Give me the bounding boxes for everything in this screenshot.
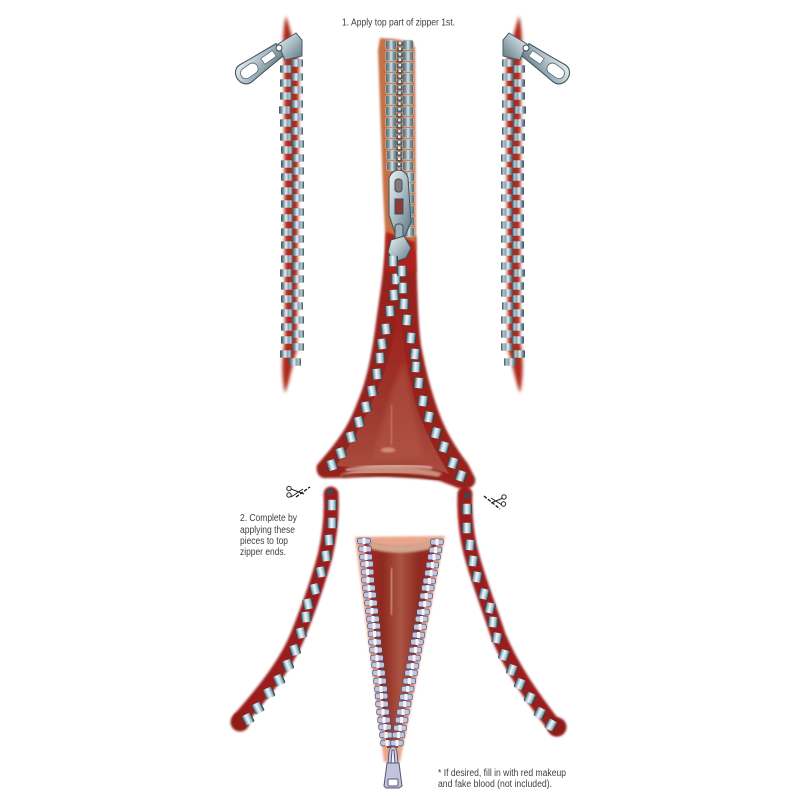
icon: left scissors and cut line	[287, 486, 310, 497]
text: step 2 instruction: pieces to top	[240, 536, 288, 547]
wound bulb end	[230, 712, 250, 732]
metal teeth	[462, 493, 558, 732]
metal teeth	[279, 59, 304, 366]
closed zipper slider	[388, 170, 411, 262]
open wound teeth, right side	[397, 266, 467, 482]
open wound teeth, left side	[326, 256, 401, 471]
footnote text	[438, 768, 566, 790]
icon: right scissors and cut line	[484, 495, 506, 509]
inner red wound	[364, 540, 437, 748]
heading: step 1 instruction: 1. Apply top part of zipper 1st.	[342, 18, 455, 28]
wound bulb end	[548, 718, 566, 736]
flesh highlight	[391, 568, 392, 615]
red wound line	[282, 16, 299, 393]
footnote text: and fake blood (not included).	[438, 779, 552, 790]
red wound line	[241, 494, 331, 718]
red open wound shape	[317, 236, 475, 489]
center closed zipper and open wound	[317, 38, 475, 489]
text: step 2 instruction: 2. Complete by	[240, 513, 297, 524]
metal teeth	[241, 489, 337, 726]
text: step 2 instruction: applying these	[240, 525, 295, 536]
inner flesh area	[336, 310, 449, 474]
red wound line	[465, 494, 556, 728]
flesh highlights	[340, 362, 442, 479]
left open zipper strip	[232, 16, 304, 393]
red seam below slider	[385, 232, 416, 272]
top tan band	[366, 538, 434, 553]
left teeth	[358, 538, 393, 746]
lower left zipper end piece	[230, 489, 337, 732]
closed zipper teeth	[386, 40, 414, 237]
footnote text: * If desired, fill in with red makeup	[438, 768, 566, 779]
right open zipper strip	[501, 16, 573, 393]
zipper slider and pull tab	[232, 33, 302, 88]
text: step 2 instruction	[240, 513, 297, 558]
zipper slider and pull	[384, 747, 402, 788]
pink outline of zipper tape	[355, 536, 445, 762]
text: step 2 instruction: zipper ends.	[240, 547, 286, 558]
lower right zipper end piece	[462, 493, 566, 736]
bottom open zipper	[355, 536, 445, 788]
orange tape of closed zipper	[378, 38, 416, 250]
right teeth	[391, 539, 443, 746]
